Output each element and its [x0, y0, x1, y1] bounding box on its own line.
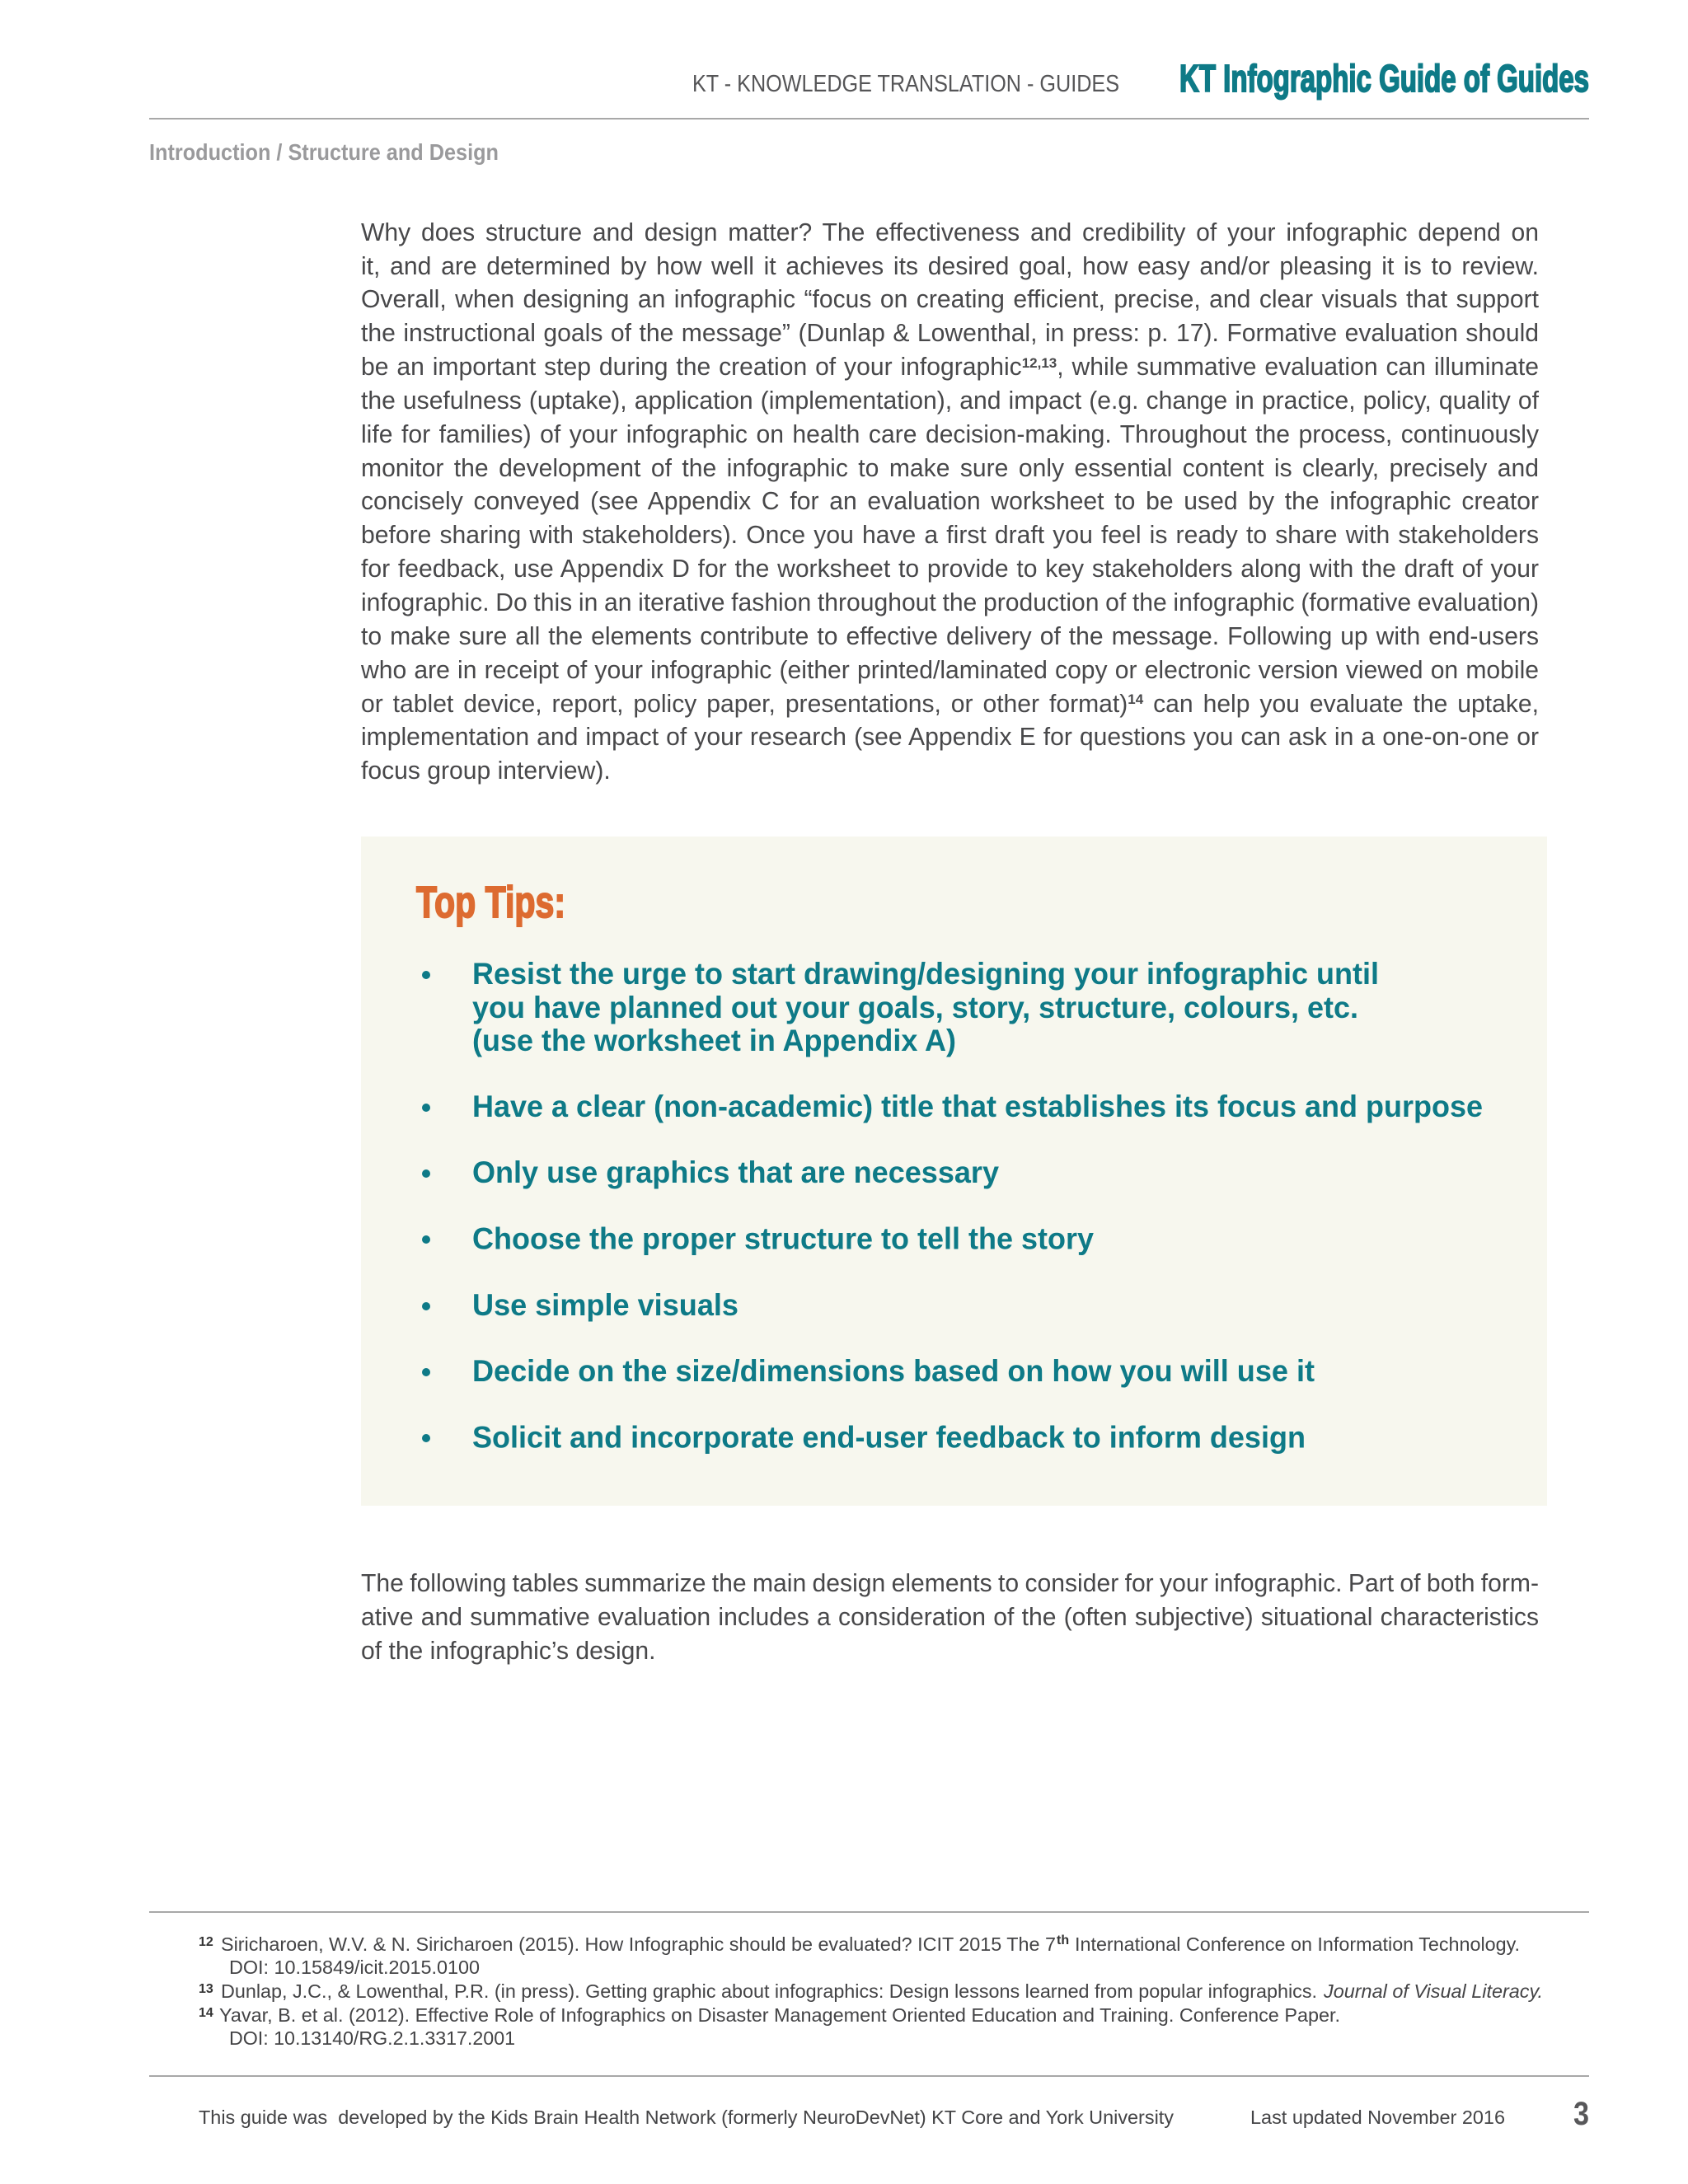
tip 2: Have a clear (non-academic) title that establishes its focus and purpose — [472, 1090, 1483, 1123]
footnotes: DOI: 10.13140/RG.2.1.3317.2001 — [229, 2027, 515, 2049]
tip 3: Only use graphics that are necessary — [472, 1155, 1000, 1189]
tip 7: Solicit and incorporate end-user feedback to inform design — [472, 1421, 1306, 1454]
panel: top tips background — [361, 837, 1547, 1506]
intro paragraph: concisely conveyed (see Appendix C for an evaluation worksheet to be used by the infographic creator — [361, 488, 1539, 515]
intro paragraph: be an important step during the creation of your infographic12,13, while summative evaluation can illuminate — [361, 354, 1539, 381]
intro paragraph: Why does structure and design matter? The effectiveness and credibility of your infographic depend on — [361, 219, 1539, 246]
footnotes — [199, 1933, 1543, 2049]
footnotes: Siricharoen, W.V. & N. Siricharoen (2015). How Infographic should be evaluated? ICIT 2015 The 7 — [221, 1933, 1056, 1955]
intro paragraph — [361, 219, 1540, 785]
footnotes: Dunlap, J.C., & Lowenthal, P.R. (in press). Getting graphic about infographics: Design lessons learned from popular infographics. — [221, 1980, 1317, 2002]
intro paragraph: or tablet device, report, policy paper, presentations, or other format)14 can help you evaluate the uptake, — [361, 691, 1539, 717]
tip 1: you have planned out your goals, story, structure, colours, etc. — [472, 991, 1358, 1024]
footnotes: 12 — [199, 1935, 213, 1949]
footer: page number: 3 — [1573, 2096, 1589, 2132]
intro paragraph: for feedback, use Appendix D for the worksheet to provide to key stakeholders along with the draft of your — [361, 555, 1539, 583]
footnotes: International Conference on Information Technology. — [1075, 1933, 1520, 1955]
intro paragraph: implementation and impact of your research (see Appendix E for questions you can ask in a one-on-one or — [361, 724, 1539, 751]
intro paragraph: life for families) of your infographic on health care decision-making. Throughout the process, continuously — [361, 421, 1539, 448]
intro paragraph: it, and are determined by how well it achieves its desired goal, how easy and/or pleasing it is to review. — [361, 253, 1539, 280]
tip 1 — [422, 957, 1379, 1057]
intro paragraph: who are in receipt of your infographic (either printed/laminated copy or electronic version viewed on mobile — [361, 657, 1539, 684]
footnotes: 14 — [199, 2006, 213, 2020]
intro paragraph: infographic. Do this in an iterative fashion throughout the production of the infographic (formative evaluation) — [361, 589, 1539, 616]
top tips heading: Top Tips: — [416, 878, 565, 927]
tip 1: (use the worksheet in Appendix A) — [472, 1024, 956, 1057]
closing paragraph: ative and summative evaluation includes a consideration of the (often subjective) situational characteristics — [361, 1604, 1539, 1631]
intro paragraph: monitor the development of the infographic to make sure only essential content is clearly, precisely and — [361, 455, 1539, 482]
closing paragraph: of the infographic’s design. — [361, 1638, 655, 1665]
closing paragraph — [361, 1570, 1539, 1665]
tip 6: Decide on the size/dimensions based on how you will use it — [472, 1354, 1315, 1388]
intro paragraph: to make sure all the elements contribute to effective delivery of the message. Following up with end-users — [361, 623, 1539, 650]
tip 5: Use simple visuals — [472, 1288, 738, 1322]
closing paragraph: The following tables summarize the main design elements to consider for your infographic. Part of both form- — [361, 1570, 1539, 1597]
tip 4: Choose the proper structure to tell the story — [472, 1221, 1095, 1256]
footnotes: th — [1057, 1933, 1069, 1947]
breadcrumb heading: Introduction / Structure and Design — [149, 139, 499, 165]
intro paragraph: focus group interview). — [361, 757, 611, 785]
footnotes: Yavar, B. et al. (2012). Effective Role of Infographics on Disaster Management Oriented Education and Training. Conference Paper. — [219, 2004, 1340, 2026]
footnotes: Journal of Visual Literacy. — [1323, 1980, 1543, 2002]
intro paragraph: the usefulness (uptake), application (implementation), and impact (e.g. change in practice, policy, quality of — [361, 387, 1539, 415]
footnotes: 13 — [199, 1982, 213, 1996]
intro paragraph: Overall, when designing an infographic “focus on creating efficient, precise, and clear visuals that support — [361, 286, 1539, 313]
intro paragraph: the instructional goals of the message” (Dunlap & Lowenthal, in press: p. 17). Formative evaluation should — [361, 320, 1539, 347]
footer: last updated: Last updated November 2016 — [1250, 2107, 1505, 2128]
footer: credit line: This guide was developed by the Kids Brain Health Network (formerly NeuroDevNet) KT Core and York University — [199, 2107, 1174, 2128]
intro paragraph: before sharing with stakeholders). Once you have a first draft you feel is ready to share with stakeholders — [361, 522, 1539, 549]
tip 1: Resist the urge to start drawing/designing your infographic until — [472, 957, 1379, 991]
footnotes: DOI: 10.15849/icit.2015.0100 — [229, 1957, 480, 1978]
header: running section label: KT - KNOWLEDGE TRANSLATION - GUIDES — [692, 71, 1119, 97]
